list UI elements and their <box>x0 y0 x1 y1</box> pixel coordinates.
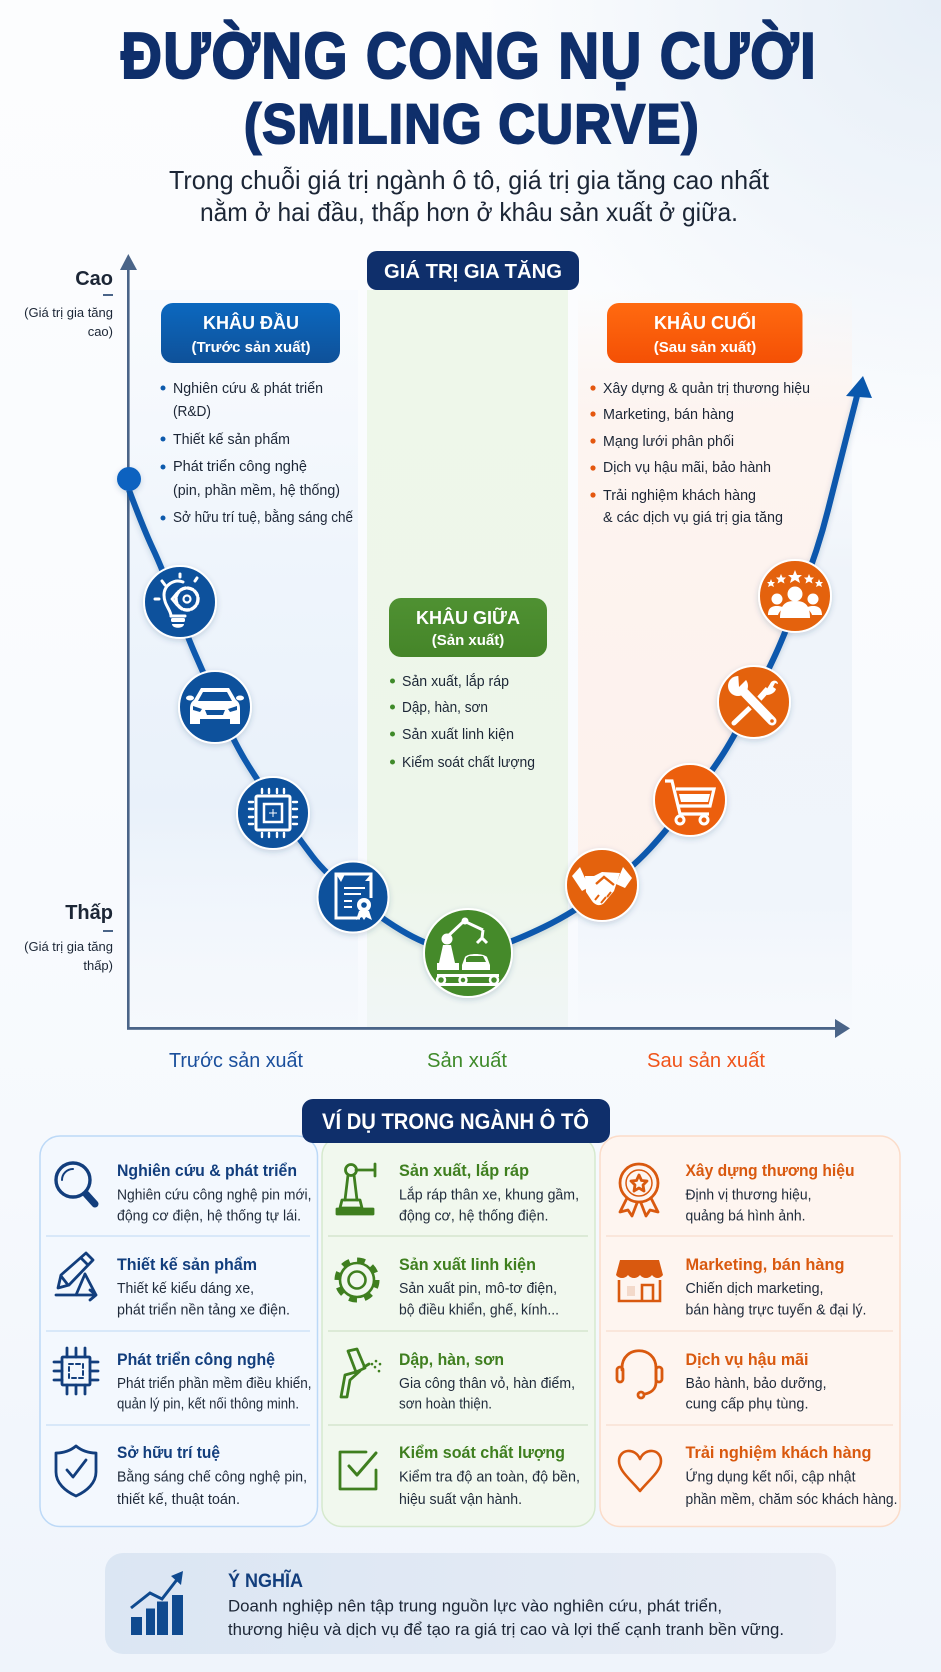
icon: customers and stars <box>759 560 831 632</box>
midstream heading box: (Sản xuất) <box>432 632 504 649</box>
icon: robot arm and car <box>424 909 512 997</box>
example: assembly: Sản xuất, lắp ráp <box>399 1161 529 1180</box>
example: technology <box>117 1350 312 1412</box>
y axis label: high: cao) <box>88 324 113 339</box>
midstream bullet list: Sản xuất, lắp ráp <box>402 673 509 690</box>
upstream heading box <box>161 303 340 363</box>
upstream bullet list: (R&D) <box>173 404 211 420</box>
meaning text: Doanh nghiệp nên tập trung nguồn lực vào nghiên cứu, phát triển, <box>228 1596 722 1616</box>
icon: headset <box>617 1351 662 1398</box>
example: intellectual property: thiết kế, thuật toán. <box>117 1491 240 1508</box>
example: product design: Thiết kế kiểu dáng xe, <box>117 1280 254 1297</box>
example: marketing: Marketing, bán hàng <box>686 1255 844 1274</box>
upstream heading box: (Trước sản xuất) <box>191 339 311 356</box>
badge: value added: GIÁ TRỊ GIA TĂNG <box>384 260 562 283</box>
example: branding <box>686 1161 854 1225</box>
badge: value added <box>367 251 579 290</box>
example: stamping welding painting <box>399 1350 575 1412</box>
downstream heading box: (Sau sản xuất) <box>654 339 756 356</box>
example: branding: Xây dựng thương hiệu <box>686 1161 854 1180</box>
card: midstream examples <box>322 1136 595 1526</box>
midstream bullet list: Kiểm soát chất lượng <box>402 755 535 771</box>
x axis labels: Trước sản xuất <box>169 1050 303 1072</box>
downstream bullet list: Mạng lưới phân phối <box>603 434 734 450</box>
example: branding: Định vị thương hiệu, <box>686 1186 812 1204</box>
chart background band: upstream <box>129 290 358 1025</box>
icon: wrench and screwdriver <box>718 666 790 738</box>
upstream bullet list: Nghiên cứu & phát triển <box>173 381 323 397</box>
panel: upstream <box>160 303 353 526</box>
example: components: Sản xuất pin, mô-tơ điện, <box>399 1280 557 1297</box>
upstream heading box: KHÂU ĐẦU <box>203 312 299 333</box>
midstream bullet list: Sản xuất linh kiện <box>402 727 514 743</box>
curve start dot <box>117 467 141 491</box>
midstream heading box <box>389 598 547 657</box>
example: after sales <box>686 1350 826 1412</box>
example: research: động cơ điện, hệ thống tự lái. <box>117 1208 301 1225</box>
example: quality control: Kiểm soát chất lượng <box>399 1443 565 1462</box>
icon: pencil <box>56 1253 96 1300</box>
example: customer experience: phần mềm, chăm sóc khách hàng. <box>686 1491 898 1508</box>
example: assembly <box>399 1161 579 1225</box>
example: technology: Phát triển phần mềm điều khiển, <box>117 1375 312 1392</box>
icon: chip <box>237 777 309 849</box>
example: after sales: Dịch vụ hậu mãi <box>686 1350 808 1369</box>
upstream bullet list: (pin, phần mềm, hệ thống) <box>173 483 340 499</box>
icon: growth chart <box>131 1571 183 1635</box>
icon: chip outline <box>54 1348 98 1394</box>
icon: magnifier <box>56 1163 95 1204</box>
downstream heading box: KHÂU CUỐI <box>654 312 756 333</box>
y axis label: high: (Giá trị gia tăng <box>24 305 113 320</box>
icon: gear <box>337 1260 377 1300</box>
chart background band: downstream <box>578 290 852 910</box>
example: stamping welding painting: Gia công thân vỏ, hàn điểm, <box>399 1375 575 1392</box>
example: technology: Phát triển công nghệ <box>117 1350 275 1369</box>
example: intellectual property: Bằng sáng chế công nghệ pin, <box>117 1469 307 1486</box>
icon: handshake <box>566 849 638 921</box>
chart background band: below curve right <box>578 420 852 1025</box>
x axis <box>127 1019 850 1038</box>
midstream bullet list: Dập, hàn, sơn <box>402 700 488 716</box>
downstream heading box <box>607 303 802 363</box>
downstream bullet list: Trải nghiệm khách hàng <box>603 488 756 504</box>
example: components: bộ điều khiển, ghế, kính... <box>399 1302 559 1319</box>
example: customer experience <box>686 1443 898 1508</box>
badge: automotive examples <box>302 1099 610 1143</box>
icon: lightbulb and gear <box>144 566 216 638</box>
example: quality control: Kiểm tra độ an toàn, độ bền, <box>399 1469 580 1486</box>
title <box>121 19 817 155</box>
example: technology: quản lý pin, kết nối thông minh. <box>117 1396 299 1412</box>
icon: award badge <box>620 1164 658 1216</box>
example: marketing: bán hàng trực tuyến & đại lý. <box>686 1302 866 1319</box>
example: customer experience: Ứng dụng kết nối, cập nhật <box>686 1469 856 1486</box>
upstream bullet list: Thiết kế sản phẩm <box>173 432 290 448</box>
downstream bullet list: & các dịch vụ giá trị gia tăng <box>603 510 783 526</box>
downstream bullet list: Xây dựng & quản trị thương hiệu <box>603 381 810 397</box>
smiling curve <box>129 392 858 952</box>
example: branding: quảng bá hình ảnh. <box>686 1208 806 1225</box>
icon: spray gun <box>341 1349 380 1397</box>
example: marketing <box>686 1255 866 1319</box>
panel: downstream <box>590 303 810 526</box>
midstream bullet list <box>390 673 535 771</box>
icon: robot arm <box>337 1164 375 1214</box>
curve arrow head <box>846 376 872 398</box>
example: intellectual property <box>117 1443 307 1508</box>
example: assembly: Lắp ráp thân xe, khung gầm, <box>399 1186 579 1204</box>
example: intellectual property: Sở hữu trí tuệ <box>117 1443 220 1462</box>
example: product design: phát triển nền tảng xe điện. <box>117 1302 290 1319</box>
icon: shield <box>56 1446 96 1496</box>
icon: patent document <box>318 862 388 932</box>
downstream bullet list: Marketing, bán hàng <box>603 407 734 423</box>
example: product design: Thiết kế sản phẩm <box>117 1255 257 1274</box>
x axis labels: Sản xuất <box>427 1050 507 1072</box>
x axis labels: Sau sản xuất <box>647 1050 765 1072</box>
example: stamping welding painting: sơn hoàn thiện. <box>399 1396 492 1412</box>
panel: meaning <box>105 1553 836 1654</box>
example: after sales: cung cấp phụ tùng. <box>686 1396 808 1412</box>
example: assembly: động cơ, hệ thống điện. <box>399 1208 548 1225</box>
icon: checkbox <box>340 1452 376 1489</box>
icon: car <box>179 671 251 743</box>
midstream heading box: KHÂU GIỮA <box>416 607 520 628</box>
example: research: Nghiên cứu công nghệ pin mới, <box>117 1186 312 1204</box>
upstream bullet list: Phát triển công nghệ <box>173 459 307 475</box>
example: after sales: Bảo hành, bảo dưỡng, <box>686 1375 826 1392</box>
example: marketing: Chiến dịch marketing, <box>686 1280 824 1297</box>
upstream bullet list <box>160 381 353 526</box>
example: research <box>117 1161 312 1225</box>
example: components: Sản xuất linh kiện <box>399 1255 536 1274</box>
icon: shopping cart <box>654 764 726 836</box>
icon: heart <box>619 1451 661 1491</box>
example: customer experience: Trải nghiệm khách hàng <box>686 1443 872 1462</box>
y axis label: low <box>24 902 113 973</box>
example: research: Nghiên cứu & phát triển <box>117 1161 297 1180</box>
downstream bullet list <box>590 381 810 526</box>
title: ĐƯỜNG CONG NỤ CƯỜI <box>121 19 817 92</box>
meaning text: Ý NGHĨA <box>228 1570 303 1592</box>
badge: automotive examples: VÍ DỤ TRONG NGÀNH Ô TÔ <box>322 1109 589 1134</box>
upstream bullet list: Sở hữu trí tuệ, bằng sáng chế <box>173 509 353 526</box>
subtitle: Trong chuỗi giá trị ngành ô tô, giá trị gia tăng cao nhất <box>169 165 770 195</box>
example: product design <box>117 1255 290 1319</box>
example: components <box>399 1255 559 1319</box>
meaning text: thương hiệu và dịch vụ để tạo ra giá trị cao và lợi thế cạnh tranh bền vững. <box>228 1620 784 1639</box>
title: (SMILING CURVE) <box>244 92 700 155</box>
meaning text <box>228 1570 784 1639</box>
example: stamping welding painting: Dập, hàn, sơn <box>399 1350 504 1369</box>
y axis label: low: (Giá trị gia tăng <box>24 939 113 954</box>
subtitle: nằm ở hai đầu, thấp hơn ở khâu sản xuất ở giữa. <box>200 197 738 227</box>
y axis label: low: thấp) <box>83 958 113 973</box>
downstream bullet list: Dịch vụ hậu mãi, bảo hành <box>603 460 771 476</box>
chart background band: midstream <box>367 290 568 1027</box>
y axis label: high: Cao <box>75 268 113 290</box>
icon: storefront <box>616 1260 663 1301</box>
example: quality control: hiệu suất vận hành. <box>399 1491 522 1508</box>
subtitle <box>169 165 770 227</box>
panel: midstream <box>389 598 547 771</box>
y axis label: low: Thấp <box>65 902 113 924</box>
card: upstream examples <box>40 1136 318 1526</box>
y axis <box>120 254 137 1029</box>
card: downstream examples <box>600 1136 900 1526</box>
x axis labels <box>169 1050 765 1072</box>
y axis label: high <box>24 268 113 339</box>
example: quality control <box>399 1443 580 1508</box>
